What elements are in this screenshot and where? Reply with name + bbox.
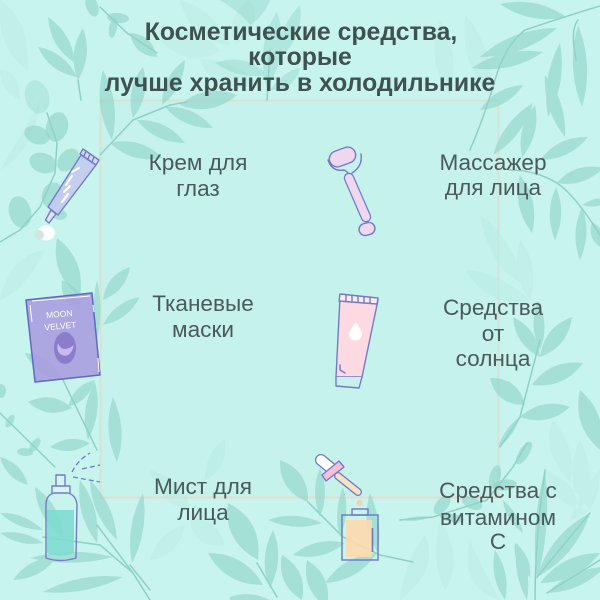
label: sun products: солнца [456, 346, 531, 371]
title [105, 19, 495, 97]
icon: face roller [327, 145, 376, 237]
leaf branch: right lower [490, 300, 600, 450]
label: face massager [439, 150, 547, 200]
label: vitamin C products: Средства с [439, 478, 557, 503]
leaf branch: eucalyptus left [0, 77, 83, 297]
icon: eye cream tube [34, 149, 99, 240]
leaf branch: top short with round leaves [83, 0, 157, 57]
leaf branch: top centre [215, 0, 301, 100]
label: face massager: для лица [445, 175, 542, 200]
icon: mist spray bottle [46, 453, 100, 560]
icon: sunscreen tube [336, 294, 378, 388]
icon: sheet mask sachet: MOON [46, 308, 73, 320]
label: sun products [443, 295, 543, 371]
title: лучше хранить в холодильнике [105, 70, 495, 97]
label: eye cream: глаз [176, 176, 220, 201]
title: которые [248, 44, 352, 71]
label: face mist: лица [177, 500, 229, 525]
title: Косметические средства, [145, 19, 457, 46]
label: sun products: от [482, 321, 504, 346]
label: eye cream: Крем для [149, 150, 247, 175]
leaf branch: far left [0, 384, 55, 544]
leaf branch: above frame corner [100, 60, 237, 159]
label: vitamin C products: витамином [440, 505, 556, 530]
label: sheet masks: Тканевые [152, 291, 254, 316]
leaf branch: top right [470, 2, 600, 157]
leaf branch: left middle [25, 267, 140, 462]
label: vitamin C products: С [490, 529, 506, 554]
leaf branch: bottom centre [130, 460, 430, 600]
leaf branch: bottom right [493, 470, 600, 600]
icon: sheet mask sachet [26, 293, 100, 382]
label: face mist: Мист для [154, 474, 252, 499]
label: sheet masks: маски [172, 317, 234, 342]
label: face mist [154, 474, 252, 525]
icon: vitamin C dropper bottle [321, 460, 378, 560]
leaf branch: bottom left [13, 480, 150, 600]
label: sheet masks [152, 291, 254, 342]
leaf branch: top left [38, 17, 87, 100]
label: face massager: Массажер [439, 150, 547, 175]
label: eye cream [149, 150, 247, 201]
icon: sheet mask sachet: VELVET [44, 320, 77, 332]
leaf branch: small round leaves [400, 439, 535, 524]
label: sun products: Средства [443, 295, 543, 320]
leaf branch: right middle [510, 137, 600, 260]
label: vitamin C products [439, 478, 557, 554]
